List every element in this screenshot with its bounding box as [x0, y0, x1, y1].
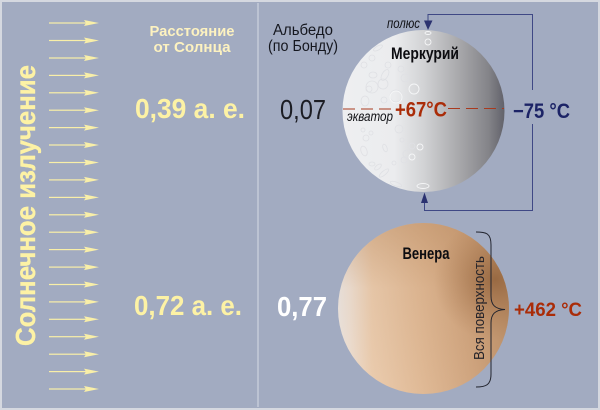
Venus distance: 0,72 а. е. [134, 290, 242, 321]
solar radiation arrows [49, 20, 99, 392]
equator temperature: +67°C [395, 98, 447, 122]
polar temperature bracket and arrows [424, 14, 532, 210]
polar temperature: −75 °C [513, 100, 570, 123]
planet: Mercury [342, 30, 504, 192]
heading: Bond albedo: Альбедо [273, 22, 333, 39]
planet: Venus [338, 223, 509, 394]
heading: Bond albedo [268, 22, 338, 55]
Mercury distance: 0,39 а. е. [135, 93, 245, 124]
bright craters [390, 32, 431, 188]
whole surface label: Вся поверхность [472, 256, 488, 360]
arrowhead: north pole [424, 20, 432, 30]
Mercury albedo: 0,07 [280, 94, 326, 125]
equator label: экватор [347, 109, 393, 124]
Venus albedo: 0,77 [277, 291, 327, 322]
heading: distance from the Sun: Расстояние [150, 23, 234, 40]
Mercury name: Меркурий [391, 44, 459, 63]
craters [357, 44, 419, 188]
pole label: полюс [387, 16, 420, 31]
equator line [343, 108, 504, 110]
vertical heading: solar radiation: Солнечное излучение [10, 65, 41, 346]
Venus temperature: +462 °C [514, 299, 582, 321]
arrowhead: south pole [421, 192, 428, 203]
heading: Bond albedo: (по Бонду) [268, 38, 338, 55]
Venus name: Венера [402, 244, 450, 263]
column divider [257, 3, 259, 407]
heading: distance from the Sun: от Солнца [154, 39, 231, 56]
brace [476, 232, 505, 387]
heading: distance from the Sun [150, 23, 234, 56]
